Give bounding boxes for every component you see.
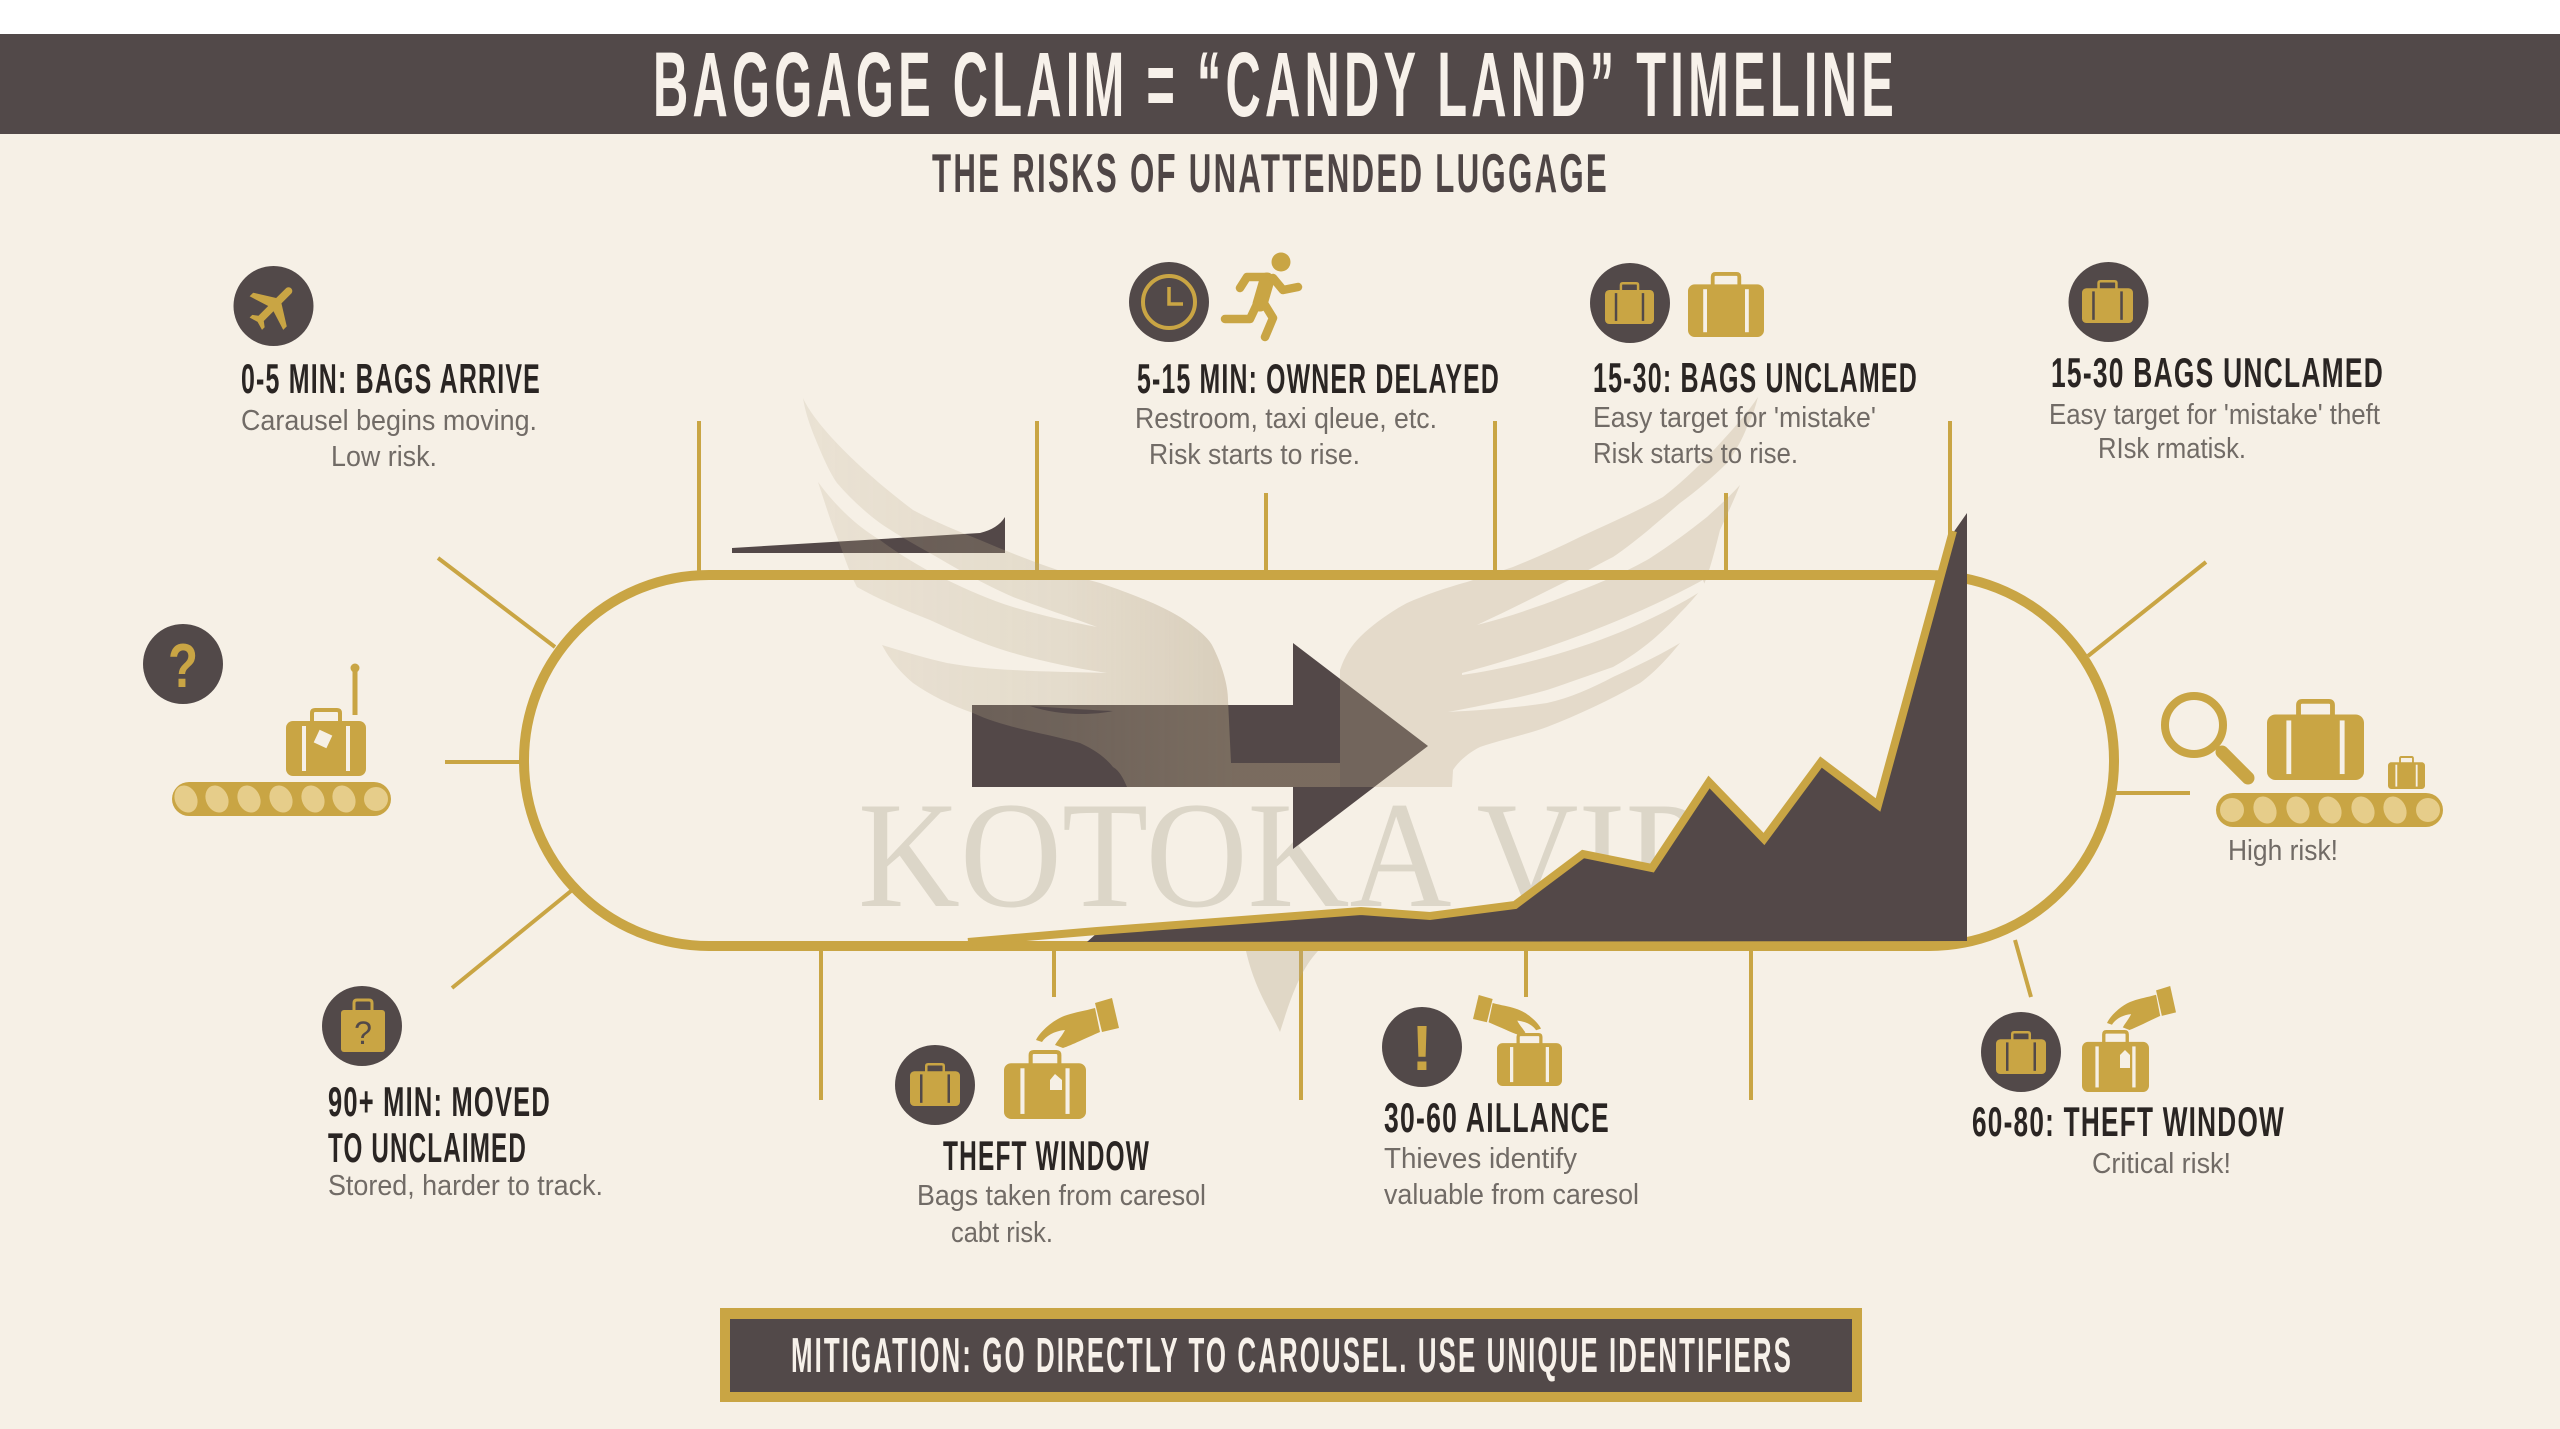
step: 30-60 surveillance: Thieves identify — [1384, 1143, 1577, 1175]
icon: suitcase with antenna — [286, 664, 366, 776]
icon: suitcase with question mark: ? — [354, 1015, 372, 1051]
step: theft window — [895, 998, 1206, 1249]
icon: large suitcase — [2267, 701, 2364, 780]
icon: hand taking suitcase — [1004, 998, 1119, 1119]
step: 90+ min moved to unclaimed — [322, 986, 603, 1202]
step: 60-80 theft window — [1972, 986, 2285, 1180]
step: 0-5 min bags arrive: Low risk. — [331, 441, 437, 473]
icon: small suitcase — [2388, 757, 2425, 789]
step: 15-30 bags unclaimed, second — [2049, 262, 2384, 465]
right wing — [1340, 397, 1758, 787]
step: 15-30 bags unclaimed: 15-30: BAGS UNCLAMED — [1593, 354, 1918, 401]
icon: clock — [1129, 262, 1209, 342]
watermark text: KOTOKA VIP: KOTOKA VIP — [858, 771, 1704, 939]
icon: magnifying glass — [2165, 696, 2248, 778]
step: 0-5 min bags arrive — [234, 266, 541, 473]
step: 60-80 theft window: Critical risk! — [2092, 1148, 2231, 1180]
step: 30-60 surveillance: valuable from caresol — [1384, 1179, 1639, 1211]
right carousel group — [2165, 696, 2443, 867]
timeline track — [524, 575, 2114, 946]
step: theft window: THEFT WINDOW — [943, 1132, 1150, 1179]
icon: large suitcase — [1688, 274, 1764, 337]
risk area chart — [968, 513, 1967, 942]
icon: plane — [234, 266, 314, 346]
wing tail — [1246, 951, 1318, 1032]
connector lines — [438, 421, 2206, 1100]
icon: suitcase badge — [895, 1045, 975, 1125]
step: 15-30 bags unclaimed — [1590, 263, 1918, 470]
left carousel group — [143, 624, 391, 816]
step: 5-15 min owner delayed — [1129, 252, 1500, 471]
left wing — [803, 398, 1340, 787]
watermark: wings emblem — [803, 397, 1758, 1032]
step: 0-5 min bags arrive: 0-5 MIN: BAGS ARRIVE — [241, 355, 541, 402]
icon: suitcase badge — [1590, 263, 1670, 343]
step: theft window: Bags taken from caresol — [917, 1180, 1206, 1212]
step: theft window: cabt risk. — [951, 1217, 1053, 1249]
icon: running person — [1225, 252, 1298, 337]
icon: conveyor belt — [170, 782, 391, 816]
step: 0-5 min bags arrive: Carausel begins moving. — [241, 405, 537, 437]
subtitle: THE RISKS OF UNATTENDED LUGGAGE — [932, 142, 1609, 204]
step: 90+ min moved to unclaimed: Stored, harder to track. — [328, 1170, 603, 1202]
icon: exclamation badge: ! — [1411, 1012, 1433, 1084]
icon: suitcase badge — [2068, 262, 2148, 342]
icon: hand taking suitcase — [2082, 986, 2176, 1092]
icon: hand taking suitcase — [1473, 995, 1562, 1086]
small risk wedge — [732, 517, 1005, 553]
step: 5-15 min owner delayed: Restroom, taxi qleue, etc. — [1135, 403, 1437, 435]
step: 30-60 surveillance: 30-60 AILLANCE — [1384, 1094, 1610, 1141]
icon: question mark: ? — [168, 632, 198, 701]
icon: conveyor belt — [2216, 793, 2443, 827]
icon: suitcase badge — [1981, 1012, 2061, 1092]
step: 15-30 bags unclaimed, second: Easy target for 'mistake' theft — [2049, 399, 2380, 431]
step: 30-60 surveillance — [1382, 995, 1639, 1211]
right carousel group: High risk! — [2228, 835, 2338, 867]
step: 15-30 bags unclaimed: Easy target for 'mistake' — [1593, 402, 1876, 434]
step: 90+ min moved to unclaimed: TO UNCLAIMED — [328, 1124, 527, 1171]
icon: suitcase with question mark — [322, 986, 402, 1066]
step: 60-80 theft window: 60-80: THEFT WINDOW — [1972, 1098, 2285, 1145]
mitigation banner — [720, 1308, 1862, 1402]
icon: exclamation badge — [1382, 1007, 1462, 1087]
icon: question mark — [143, 624, 223, 704]
step: 15-30 bags unclaimed: Risk starts to rise. — [1593, 438, 1798, 470]
step: 90+ min moved to unclaimed: 90+ MIN: MOVED — [328, 1078, 551, 1125]
step: 5-15 min owner delayed: Risk starts to rise. — [1149, 439, 1360, 471]
step: 5-15 min owner delayed: 5-15 MIN: OWNER DELAYED — [1137, 355, 1500, 402]
step: 15-30 bags unclaimed, second: RIsk rmatisk. — [2098, 433, 2246, 465]
central arrow — [972, 643, 1428, 849]
